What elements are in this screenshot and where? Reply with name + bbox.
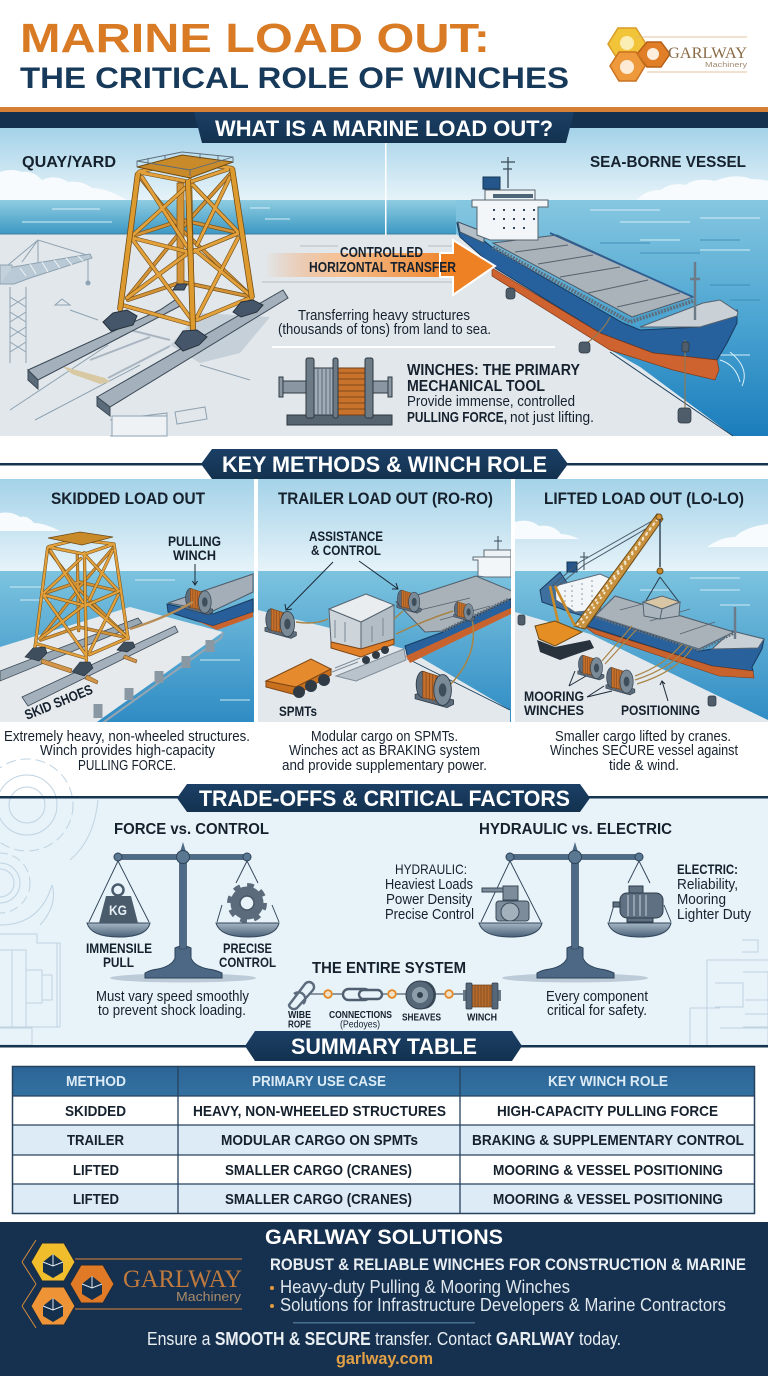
caption: lifted: Winches SECURE vessel against <box>550 743 738 759</box>
text: electric: ELECTRIC: <box>677 861 738 877</box>
labels: immense pull, precise control: IMMENSILE <box>86 940 152 956</box>
heading: force vs control: FORCE vs. CONTROL <box>114 821 269 838</box>
text: electric: Mooring <box>677 892 726 908</box>
mooring winches <box>602 626 692 684</box>
caption: lifted: tide & wind. <box>609 758 679 774</box>
label: positioning <box>621 681 700 718</box>
crane <box>535 514 680 660</box>
transfer text <box>278 307 491 338</box>
heading band: key methods: KEY METHODS & WINCH ROLE <box>222 452 547 477</box>
table header <box>66 1074 668 1090</box>
caption: skidded: PULLING FORCE. <box>78 758 176 774</box>
row: trailer: BRAKING & SUPPLEMENTARY CONTROL <box>472 1132 744 1149</box>
text: hydraulic: HYDRAULIC: <box>395 861 467 877</box>
the entire system: SHEAVES <box>402 1012 441 1024</box>
panel: skidded load out <box>0 479 254 727</box>
quay surface <box>0 234 733 436</box>
row: skidded: SKIDDED <box>65 1103 126 1120</box>
balance scale: force vs control <box>87 842 279 982</box>
winches text: MECHANICAL TOOL <box>407 378 545 395</box>
the entire system: WIBE <box>288 1009 311 1021</box>
caption: lifted: Smaller cargo lifted by cranes. <box>555 729 731 745</box>
icon: KG weight: KG <box>109 902 127 918</box>
ship <box>457 157 744 423</box>
row: lifted repeat: MOORING & VESSEL POSITIONING <box>493 1191 723 1208</box>
row: lifted: MOORING & VESSEL POSITIONING <box>493 1162 723 1179</box>
logo: Garlway header: GARLWAY <box>668 45 747 62</box>
heading: hydraulic vs electric: HYDRAULIC vs. ELECTRIC <box>479 821 672 838</box>
panel titles: LIFTED LOAD OUT (LO-LO) <box>544 490 744 508</box>
footer bullets: Solutions for Infrastructure Developers & Marine Contractors <box>280 1295 726 1315</box>
caption: force vs control: to prevent shock loading. <box>98 1003 246 1019</box>
summary table <box>12 1066 754 1214</box>
the entire system: CONNECTIONS <box>329 1009 392 1021</box>
icon: connection chain <box>343 989 382 1000</box>
SPMT <box>266 658 360 698</box>
label: mooring <box>524 671 612 718</box>
skid rail tracks <box>28 290 288 416</box>
caption: every component: Every component <box>546 989 648 1005</box>
caption: trailer: Modular cargo on SPMTs. <box>311 729 458 745</box>
sea left and right <box>0 200 470 234</box>
row: trailer <box>67 1132 744 1149</box>
the entire system: WINCH <box>467 1012 497 1024</box>
divider <box>385 143 386 235</box>
winches <box>296 609 474 686</box>
caption: skidded <box>4 729 250 774</box>
caption: skidded: Winch provides high-capacity <box>40 743 216 759</box>
blueprint drawings <box>0 759 768 1045</box>
icon: winch <box>279 358 392 425</box>
labels: immense pull, precise control: PULL <box>103 954 134 970</box>
row: lifted: LIFTED <box>73 1162 119 1179</box>
caption: trailer: and provide supplementary power. <box>282 758 487 774</box>
heading band: trade-offs <box>0 784 768 812</box>
cargo <box>329 594 394 664</box>
transfer text: (thousands of tons) from land to sea. <box>278 321 491 338</box>
connector dots <box>324 990 453 998</box>
row: lifted repeat <box>73 1191 723 1208</box>
arrow: controlled horizontal transfer: HORIZONTAL TRANSFER <box>309 259 456 276</box>
rails <box>0 618 142 681</box>
transfer text: Transferring heavy structures <box>298 307 470 324</box>
labels: immense pull, precise control: PRECISE <box>223 940 272 956</box>
panel titles: TRAILER LOAD OUT (RO-RO) <box>278 490 493 508</box>
row: skidded: HEAVY, NON-WHEELED STRUCTURES <box>193 1103 446 1120</box>
title: THE CRITICAL ROLE OF WINCHES <box>20 62 569 95</box>
table header: PRIMARY USE CASE <box>252 1074 386 1090</box>
logo: Garlway footer <box>22 1240 242 1328</box>
title: MARINE LOAD OUT: <box>20 15 490 61</box>
logo: Garlway header <box>608 28 748 81</box>
heading band: key methods <box>0 449 768 479</box>
quay <box>258 610 510 722</box>
text: hydraulic <box>385 861 474 923</box>
logo: Garlway footer: GARLWAY <box>123 1266 242 1293</box>
caption: force vs control: Must vary speed smoothly <box>96 989 250 1005</box>
clouds <box>0 170 768 200</box>
label: positioning: POSITIONING <box>621 702 700 718</box>
winches text: not just lifting. <box>510 409 594 426</box>
footer call to action: Ensure a SMOOTH & SECURE transfer. Contact GARLWAY today. <box>147 1329 621 1349</box>
quay <box>515 612 768 722</box>
arrow: controlled horizontal transfer: CONTROLLED <box>340 244 423 261</box>
row: lifted repeat: SMALLER CARGO (CRANES) <box>225 1191 412 1208</box>
labels: immense pull, precise control <box>86 940 276 970</box>
winches text: PULLING FORCE, <box>407 409 507 426</box>
text: hydraulic: Power Density <box>386 892 473 908</box>
arrow: controlled horizontal transfer <box>262 240 495 295</box>
heading band: trade-offs: TRADE-OFFS & CRITICAL FACTORS <box>199 786 570 811</box>
icon: small winch <box>463 983 501 1009</box>
row: skidded <box>65 1103 718 1120</box>
caption: skidded: Extremely heavy, non-wheeled structures. <box>4 729 250 745</box>
jacket structure <box>103 152 263 351</box>
panel titles <box>51 490 744 508</box>
label: assistance: & CONTROL <box>311 542 381 558</box>
panel: what is a marine load out <box>0 128 768 436</box>
table header: METHOD <box>66 1074 126 1090</box>
label: vessel: SEA-BORNE VESSEL <box>590 154 746 171</box>
background crane drawing <box>0 240 250 436</box>
row: lifted repeat: LIFTED <box>73 1191 119 1208</box>
labels: immense pull, precise control: CONTROL <box>219 954 276 970</box>
icon: hydraulic pump <box>482 886 529 921</box>
heading band: summary table: SUMMARY TABLE <box>291 1034 477 1059</box>
heading band: summary table <box>0 1031 768 1061</box>
footer bullets: Heavy-duty Pulling & Mooring Winches <box>280 1277 570 1297</box>
caption: every component: critical for safety. <box>547 1003 647 1019</box>
label: pulling winch <box>168 533 221 585</box>
panel: lifted load out <box>515 479 768 722</box>
ship <box>540 571 584 616</box>
the entire system: THE ENTIRE SYSTEM <box>312 960 466 977</box>
row: lifted: SMALLER CARGO (CRANES) <box>225 1162 412 1179</box>
label: pulling winch: WINCH <box>173 547 216 563</box>
title <box>20 15 569 95</box>
icon: KG weight <box>99 884 138 923</box>
winches text: Provide immense, controlled <box>407 393 575 410</box>
logo: Garlway header: Machinery <box>705 62 748 69</box>
footer bullets <box>270 1277 726 1315</box>
label: mooring: WINCHES <box>524 702 584 718</box>
panel titles: SKIDDED LOAD OUT <box>51 490 205 508</box>
caption: every component <box>546 989 648 1019</box>
panel: trailer load out <box>258 479 512 722</box>
label: pulling winch: PULLING <box>168 533 221 549</box>
the entire system: (Pedoyes) <box>340 1020 380 1030</box>
caption: force vs control <box>96 989 250 1019</box>
jacket <box>35 540 128 662</box>
quay <box>0 607 223 722</box>
row: skidded: HIGH-CAPACITY PULLING FORCE <box>497 1103 718 1120</box>
caption: trailer: Winches act as BRAKING system <box>289 743 480 759</box>
label: quay: QUAY/YARD <box>22 154 116 171</box>
logo: Garlway footer: Machinery <box>176 1289 242 1304</box>
label: skid shoes: SKID SHOES <box>22 681 95 723</box>
label: assistance: ASSISTANCE <box>309 528 383 544</box>
text: electric: Reliability, <box>677 877 738 893</box>
text: hydraulic: Heaviest Loads <box>385 877 473 893</box>
label: SPMTs: SPMTs <box>279 703 317 719</box>
caption: lifted <box>550 729 738 774</box>
text: electric: Lighter Duty <box>677 907 752 923</box>
table header: KEY WINCH ROLE <box>548 1074 668 1090</box>
caption: trailer <box>282 729 487 774</box>
the entire system: ROPE <box>288 1018 311 1030</box>
heading band: what is <box>0 107 768 143</box>
barge <box>168 574 253 611</box>
ship <box>396 576 512 632</box>
label: assistance <box>285 528 398 610</box>
the entire system <box>288 960 501 1030</box>
winches text: WINCHES: THE PRIMARY <box>407 362 580 379</box>
footer heading: GARLWAY SOLUTIONS <box>265 1226 503 1249</box>
text: electric <box>677 861 752 923</box>
icon: sheave <box>406 981 436 1009</box>
icon: gear <box>230 886 264 920</box>
footer: garlway solutions <box>0 1222 768 1376</box>
footer url: garlway.com <box>336 1349 433 1368</box>
heading band: what is: WHAT IS A MARINE LOAD OUT? <box>215 116 553 141</box>
icon: electric motor <box>613 886 663 922</box>
panel: trade-offs <box>0 759 768 1045</box>
balance scale: hydraulic vs electric <box>479 842 671 982</box>
icon: wire rope <box>289 982 314 1009</box>
row: trailer: TRAILER <box>67 1132 124 1149</box>
winches text <box>407 362 594 426</box>
text: hydraulic: Precise Control <box>385 907 474 923</box>
row: trailer: MODULAR CARGO ON SPMTs <box>221 1132 418 1149</box>
label: mooring: MOORING <box>524 688 584 704</box>
row: lifted <box>73 1162 723 1179</box>
